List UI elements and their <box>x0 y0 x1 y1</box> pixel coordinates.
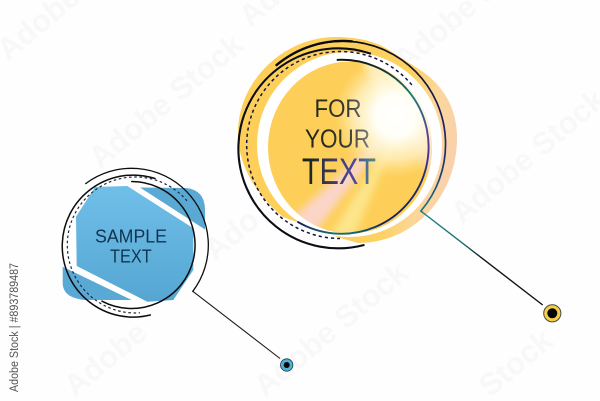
outer line arcs <box>86 168 208 292</box>
watermark: Stock <box>472 322 560 401</box>
label text: TEXT <box>110 247 152 267</box>
label text: SAMPLE <box>95 227 167 247</box>
inner sunlit disc <box>268 62 432 234</box>
leader line: large circle <box>423 213 561 322</box>
watermark: Adobe Stock <box>247 254 415 401</box>
blue fragment top right <box>140 188 205 230</box>
inner arc <box>102 182 195 308</box>
watermark: Adobe <box>57 315 153 401</box>
heading text: FOR <box>314 95 362 123</box>
label text <box>95 227 167 267</box>
dashed arc <box>67 177 187 313</box>
white ring <box>257 52 442 237</box>
leader line: small circle <box>193 292 293 371</box>
watermark: Adobe Stock <box>82 26 250 175</box>
outer line arcs <box>276 41 446 213</box>
icon: yellow dot <box>544 305 561 322</box>
heading text: YOUR <box>305 123 370 153</box>
vertical credit text: Adobe Stock | #893789487 <box>9 263 21 392</box>
blue hexagon <box>76 186 193 302</box>
callout: small blue circle <box>62 168 208 317</box>
watermark: Ado <box>197 202 266 267</box>
icon: blue dot <box>280 359 293 371</box>
inner gradient arc <box>297 60 429 234</box>
blue fragment bottom left <box>63 267 132 300</box>
heading text <box>302 95 376 192</box>
dashed arc <box>247 52 412 239</box>
yellow blob background <box>238 37 457 243</box>
callout: large yellow circle <box>238 37 458 248</box>
heading text: TEXT <box>302 151 376 192</box>
